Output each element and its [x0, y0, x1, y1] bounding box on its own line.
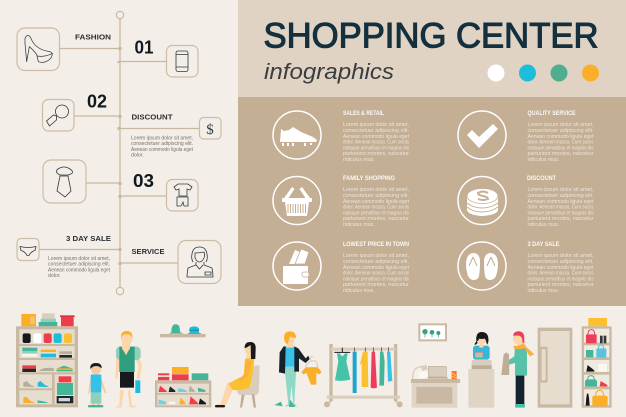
illustration: seated woman, saleswoman, clothes rack [215, 331, 403, 408]
child [88, 363, 107, 407]
feature: lowest price in town: LOWEST PRICE IN TOWN [343, 242, 409, 248]
text: 3 day sale body: dolor. [48, 273, 61, 279]
feature: discount: Aenean commodo ligula eget [528, 199, 594, 205]
feature: quality service: Aenean commodo ligula eget [528, 134, 594, 140]
feature: family shopping [273, 176, 410, 228]
feature: lowest price in town: ridiculus mus. [343, 288, 375, 294]
number 02: 02 [87, 92, 107, 112]
feature: quality service: natoque penatibus et magnis dis [528, 146, 594, 152]
feature: quality service: parturient montes, nascetur [528, 151, 594, 157]
feature: family shopping: FAMILY SHOPPING [343, 176, 395, 182]
icon: dollar [200, 118, 221, 139]
feature: quality service: Lorem ipsum dolor sit amet, [528, 122, 594, 128]
feature: discount: DISCOUNT [527, 176, 556, 182]
text: discount body: Aenean commodo ligula eget [131, 147, 194, 153]
feature: sales and retail: Aenean commodo ligula eget [343, 134, 410, 140]
feature: sales and retail: natoque penatibus et magnis dis [343, 146, 409, 152]
feature: 3 day sale: ridiculus mus. [528, 288, 559, 294]
feature: 3 day sale: natoque penatibus et magnis dis [528, 276, 594, 282]
feature: sales and retail [273, 111, 410, 163]
feature: 3 day sale: consectetuer adipiscing elit. [528, 259, 594, 265]
feature: discount: dolor. Aenean massa. Cum sociis [528, 204, 594, 210]
icon: underwear [17, 238, 39, 260]
text: 3 day sale body: Aenean commodo ligula eget [48, 268, 111, 274]
feature: sales and retail: ridiculus mus. [343, 157, 375, 163]
text: discount body: consectetuer adipiscing elit. [131, 141, 193, 147]
customer with scarf [501, 331, 534, 408]
seated woman [215, 342, 260, 408]
wall picture [418, 323, 447, 341]
label: service: SERVICE [132, 247, 164, 256]
timeline [39, 11, 199, 295]
feature: lowest price in town: consectetuer adipiscing elit. [343, 259, 409, 265]
feature: family shopping: ridiculus mus. [343, 222, 375, 228]
label: discount: DISCOUNT [132, 112, 173, 122]
number 01: 01 [134, 38, 154, 58]
feature: lowest price in town: parturient montes, nascetur [343, 282, 409, 288]
text: 3 day sale body [48, 256, 111, 279]
feature: quality service: ridiculus mus. [528, 157, 559, 163]
label: fashion: FASHION [75, 32, 111, 42]
feature: quality service: QUALITY SERVICE [528, 111, 576, 117]
feature: sales and retail: dolor. Aenean massa. Cum sociis [343, 140, 409, 146]
woman holding shirt [274, 331, 322, 407]
feature: discount: natoque penatibus et magnis dis [528, 210, 594, 216]
illustration: checkout, door, bag shelf [411, 318, 612, 408]
man [115, 331, 142, 407]
feature: family shopping: Lorem ipsum dolor sit amet, [343, 187, 409, 193]
feature: discount: Lorem ipsum dolor sit amet, [528, 187, 594, 193]
bag shelf [582, 318, 612, 408]
text: 3 day sale body: consectetuer adipiscing elit. [48, 262, 110, 268]
text: discount body: Lorem ipsum dolor sit amet, [131, 136, 193, 142]
label: 3 day sale: 3 DAY SALE [66, 234, 111, 243]
feature: sales and retail: consectetuer adipiscing elit. [343, 128, 409, 134]
feature: quality service: dolor. Aenean massa. Cum sociis [528, 140, 594, 146]
feature: lowest price in town [273, 242, 410, 294]
hats on shelf [160, 324, 206, 337]
feature: sales and retail: SALES & RETAIL [343, 111, 384, 117]
desk with lamp and laptop [411, 365, 460, 408]
panel: features [238, 97, 626, 306]
door [538, 328, 572, 408]
feature: family shopping: Aenean commodo ligula eget [343, 199, 410, 205]
low shoe shelf [155, 367, 211, 407]
feature: discount: ridiculus mus. [528, 222, 559, 228]
number 03: 03 [133, 171, 154, 191]
icon: saleswoman [178, 240, 221, 284]
text: discount body [131, 136, 194, 158]
text: discount body: dolor. [131, 152, 144, 158]
subtitle: infographics [264, 59, 394, 84]
feature: discount [458, 176, 594, 228]
feature: family shopping: consectetuer adipiscing elit. [343, 193, 409, 199]
feature: family shopping: dolor. Aenean massa. Cum sociis [343, 204, 409, 210]
feature: family shopping: natoque penatibus et magnis dis [343, 210, 409, 216]
feature: 3 day sale: Lorem ipsum dolor sit amet, [528, 253, 594, 259]
feature: 3 day sale: parturient montes, nascetur [528, 282, 594, 288]
panel: header [238, 0, 626, 97]
large shelf [16, 313, 78, 407]
feature: lowest price in town: Aenean commodo ligula eget [343, 265, 410, 271]
feature: 3 day sale: 3 DAY SALE [528, 242, 560, 248]
icon: tie [43, 160, 86, 203]
feature: lowest price in town: natoque penatibus et magnis dis [343, 276, 409, 282]
feature: discount: consectetuer adipiscing elit. [528, 193, 594, 199]
feature: quality service [458, 111, 594, 163]
feature: 3 day sale: dolor. Aenean massa. Cum sociis [528, 270, 594, 276]
text: 3 day sale body: Lorem ipsum dolor sit amet, [48, 256, 110, 262]
feature: sales and retail: Lorem ipsum dolor sit amet, [343, 122, 409, 128]
feature: 3 day sale [458, 242, 594, 294]
feature: lowest price in town: Lorem ipsum dolor sit amet, [343, 253, 409, 259]
feature: 3 day sale: Aenean commodo ligula eget [528, 265, 594, 271]
feature: sales and retail: parturient montes, nascetur [343, 151, 409, 157]
colour dots [488, 64, 599, 82]
feature: quality service: consectetuer adipiscing elit. [528, 128, 594, 134]
icon: dollar: $ [206, 122, 214, 138]
feature: lowest price in town: dolor. Aenean massa. Cum sociis [343, 270, 409, 276]
clothes rack [324, 344, 403, 407]
illustration: shelves and customers [16, 313, 211, 407]
cashier [468, 332, 494, 408]
icon: magnifier [42, 100, 74, 131]
feature: discount: parturient montes, nascetur [528, 216, 594, 222]
icon: t-shirt and shorts [166, 180, 198, 211]
title: SHOPPING CENTER [264, 16, 598, 56]
feature: family shopping: parturient montes, nascetur [343, 216, 409, 222]
icon: phone [166, 46, 198, 77]
icon: high heel [17, 28, 60, 70]
